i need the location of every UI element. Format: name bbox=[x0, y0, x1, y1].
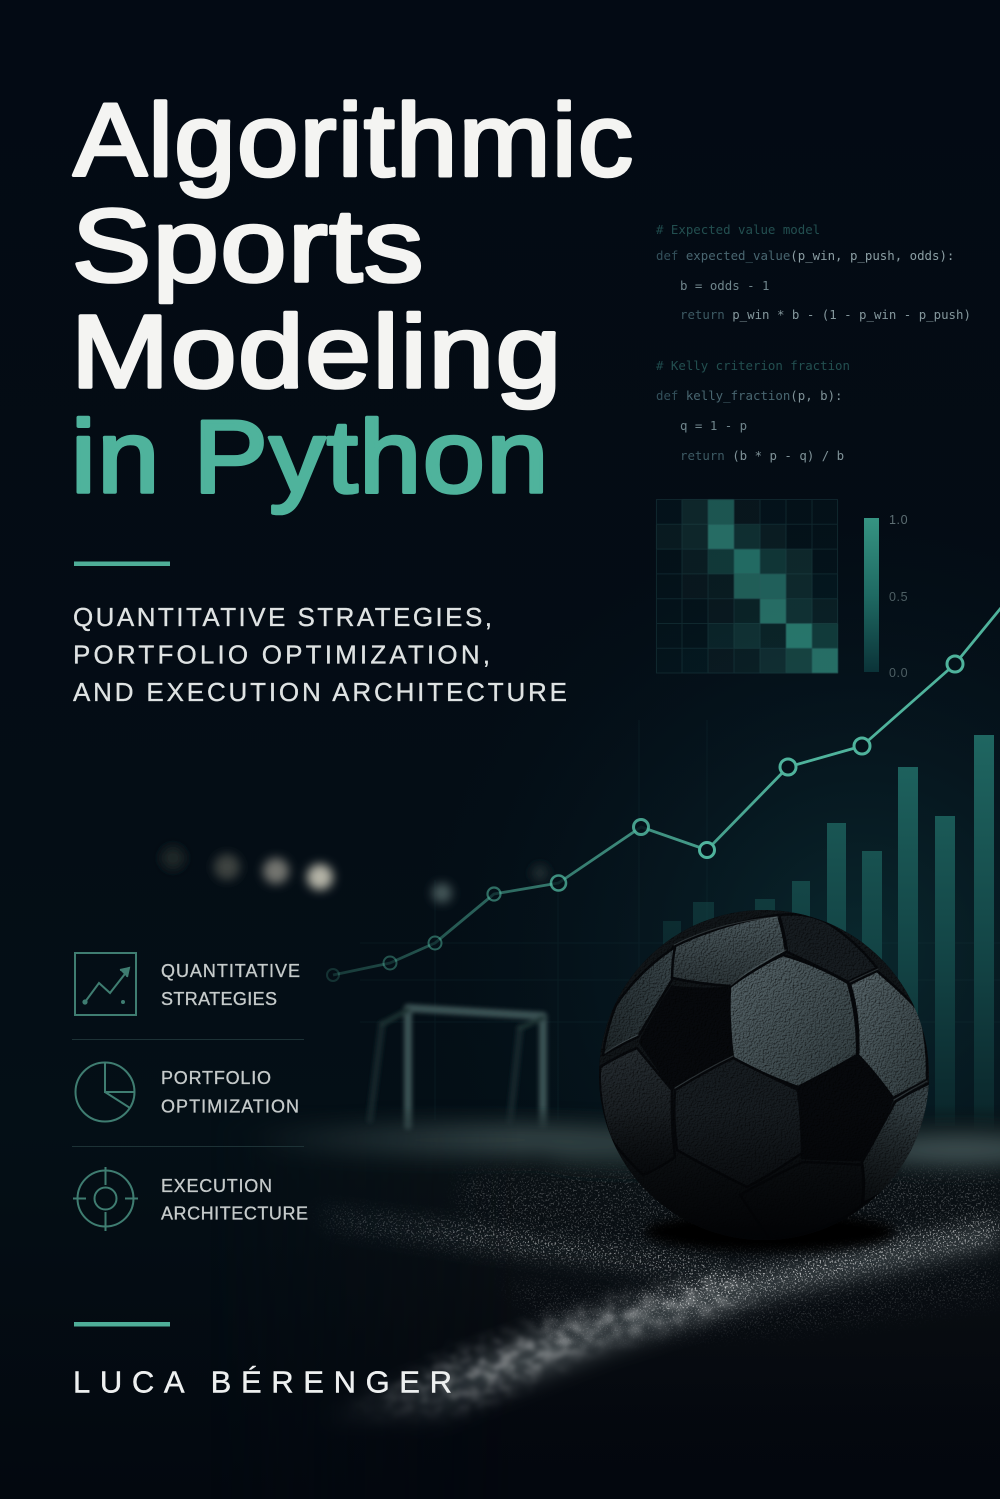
label: EXECUTION bbox=[161, 1176, 272, 1196]
contact shadow bbox=[645, 1212, 895, 1252]
title bbox=[71, 82, 634, 514]
scale label 0.5: 0.5 bbox=[889, 590, 908, 604]
label bbox=[161, 1176, 308, 1224]
feature list bbox=[72, 953, 308, 1231]
horizon glow bbox=[260, 1125, 1000, 1167]
fade to bottom bbox=[385, 1380, 506, 1420]
soccer ball bbox=[590, 910, 940, 1252]
icon: chart in square bbox=[75, 953, 136, 1015]
subtitle line 3: AND EXECUTION ARCHITECTURE bbox=[73, 677, 567, 707]
scale label 1.0: 1.0 bbox=[889, 513, 908, 527]
label: QUANTITATIVE bbox=[161, 961, 300, 981]
grass speckle in focus bbox=[320, 1175, 1000, 1340]
function expected_value: def expected_value(p_win, p_push, odds): bbox=[656, 248, 954, 263]
comment: expected value: # Expected value model bbox=[656, 222, 820, 237]
subtitle line 1: QUANTITATIVE STRATEGIES, bbox=[73, 602, 492, 632]
subtitle bbox=[73, 602, 567, 707]
label: ARCHITECTURE bbox=[161, 1204, 308, 1224]
title line 2: Sports bbox=[72, 188, 425, 303]
assignment q: q = 1 - p bbox=[680, 418, 747, 433]
label bbox=[161, 961, 300, 1009]
pitch line out of focus bbox=[350, 1280, 760, 1410]
feature: portfolio optimization bbox=[76, 1062, 299, 1122]
label: OPTIMIZATION bbox=[161, 1096, 299, 1116]
feature: quantitative strategies bbox=[75, 953, 300, 1015]
goal bbox=[370, 1008, 543, 1126]
return kelly: return (b * p - q) / b bbox=[680, 448, 844, 463]
pitch ground bbox=[294, 1108, 1000, 1423]
comment: kelly: # Kelly criterion fraction bbox=[656, 358, 850, 373]
feature: execution architecture bbox=[73, 1167, 308, 1231]
faint chart grid bbox=[360, 720, 1000, 1120]
icon: pie chart bbox=[76, 1062, 134, 1122]
color scale bbox=[864, 513, 908, 680]
heatmap bbox=[656, 500, 838, 673]
author: LUCA BÉRENGER bbox=[73, 1364, 452, 1400]
seam highlights bbox=[605, 917, 927, 1100]
label bbox=[161, 1068, 299, 1116]
label: PORTFOLIO bbox=[161, 1068, 271, 1088]
function kelly_fraction: def kelly_fraction(p, b): bbox=[656, 388, 842, 403]
return expected value: return p_win * b - (1 - p_win - p_push) bbox=[680, 307, 971, 322]
line chart bbox=[327, 603, 1000, 981]
label: STRATEGIES bbox=[161, 989, 277, 1009]
accent rule bottom bbox=[74, 1322, 170, 1326]
icon: target bbox=[73, 1167, 138, 1231]
accent rule top bbox=[74, 562, 170, 566]
pitch lines, soft underlay bbox=[310, 1208, 1000, 1420]
title line 4: in Python bbox=[71, 399, 550, 514]
subtitle line 2: PORTFOLIO OPTIMIZATION, bbox=[73, 640, 490, 670]
title line 1: Algorithmic bbox=[74, 82, 634, 198]
assignment b: b = odds - 1 bbox=[680, 278, 770, 293]
title line 3: Modeling bbox=[71, 294, 563, 409]
code snippet bbox=[656, 222, 971, 463]
bar chart bbox=[663, 735, 994, 1137]
scale label 0.0: 0.0 bbox=[889, 666, 908, 680]
stadium lights bbox=[161, 846, 548, 903]
